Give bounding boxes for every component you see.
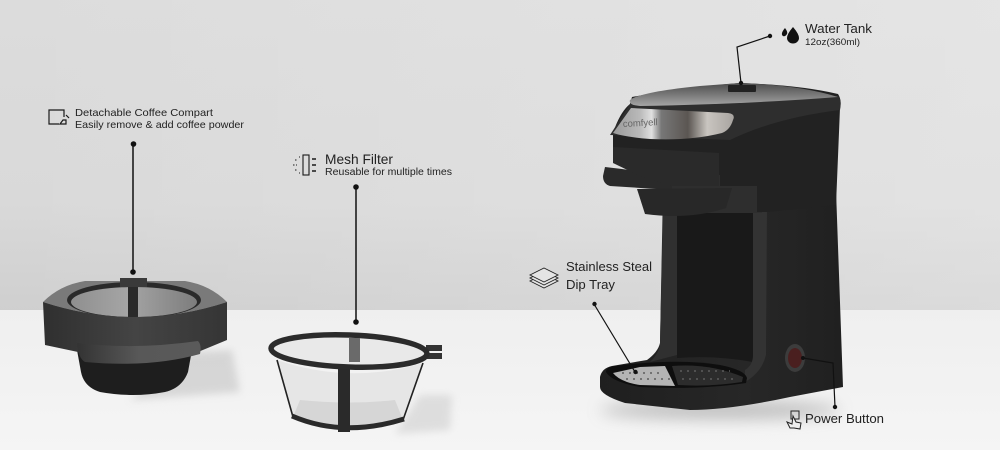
callout: water tank: 12oz(360ml) (805, 37, 860, 47)
leader line (132, 144, 134, 272)
gap behind brew cup (665, 170, 762, 213)
callout: mesh filter: Mesh Filter (325, 151, 393, 167)
head upper band (610, 96, 841, 140)
callout: water tank: Water Tank (805, 22, 873, 36)
icon: touch hand (787, 411, 801, 429)
leader line (594, 304, 635, 372)
tray perforations (622, 371, 738, 379)
callout: drip tray: Stainless Steal (566, 259, 652, 274)
mesh filter product (270, 332, 452, 434)
leader line (803, 358, 835, 407)
handle (603, 167, 672, 190)
leader line (737, 36, 770, 83)
callout: water tank (737, 22, 873, 85)
icon: water drops (782, 27, 799, 44)
compartment front (613, 147, 719, 186)
background wall (0, 0, 1000, 312)
callout: drip tray: Dip Tray (566, 277, 616, 292)
coffee compartment product (43, 278, 240, 400)
callout: detachable compartment: Easily remove & add coffee powder (75, 120, 245, 131)
brand: comfyell (623, 117, 658, 130)
head body (613, 83, 841, 212)
icon: stacked layers (530, 268, 558, 288)
brew cup (637, 188, 732, 216)
callout: detachable compartment (49, 108, 245, 275)
callout: mesh filter (293, 151, 452, 325)
callout: power button: Power Button (805, 411, 884, 426)
callout: power button (787, 356, 884, 429)
column left strip (650, 210, 677, 362)
callout: detachable compartment: Detachable Coffee Compart (75, 108, 213, 119)
background floor (0, 310, 1000, 450)
column recess (677, 205, 753, 362)
icon: filter (293, 155, 316, 175)
icon: compartment (49, 110, 69, 124)
callout: drip tray (530, 259, 652, 374)
leader line (355, 187, 357, 322)
coffee maker product (600, 83, 843, 419)
callout: mesh filter: Reusable for multiple times (325, 167, 452, 178)
maker floor shadow (600, 401, 840, 419)
power button (785, 344, 805, 372)
top lid (630, 83, 838, 106)
drip tray (606, 362, 747, 388)
column right strip (745, 205, 767, 382)
steel panel (613, 108, 734, 139)
base and column silhouette (600, 190, 843, 410)
